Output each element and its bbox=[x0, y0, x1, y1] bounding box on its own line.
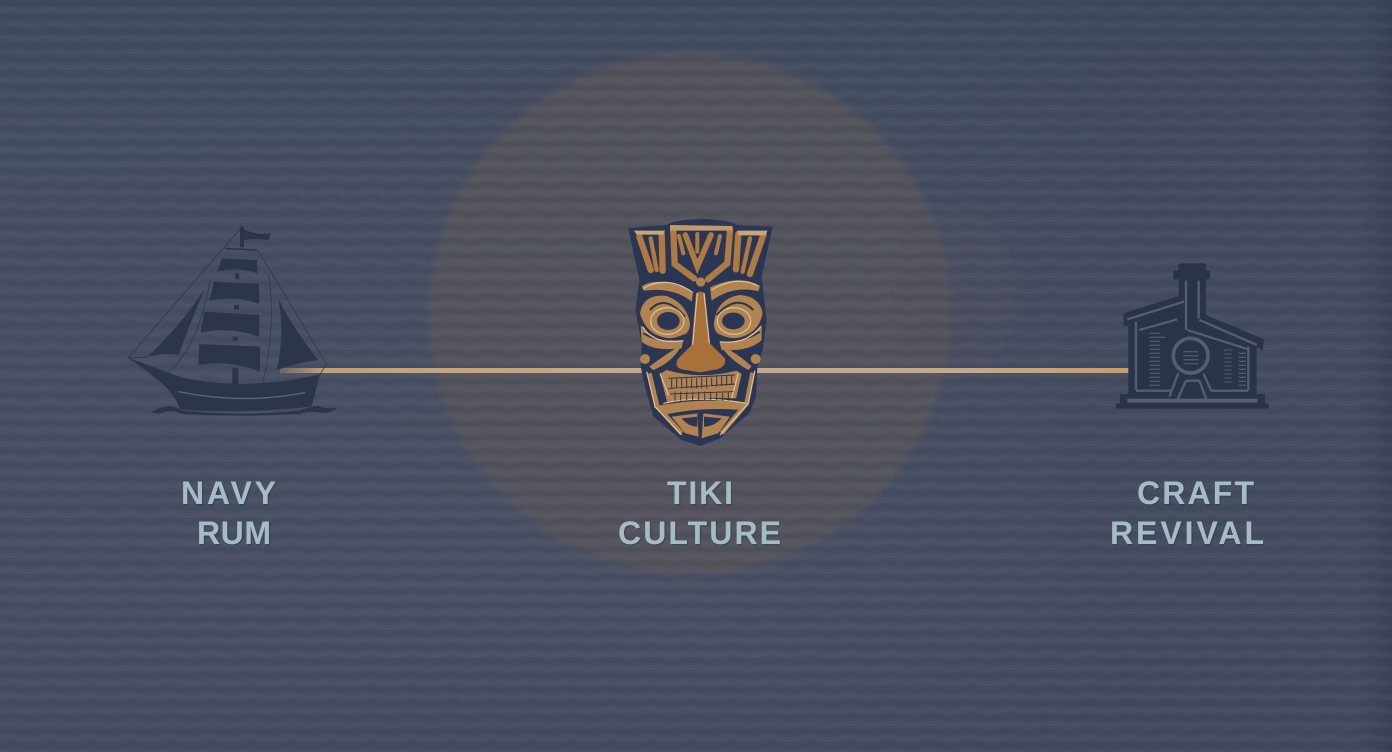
forehead panels bbox=[639, 231, 763, 279]
label: tiki culture bbox=[618, 475, 781, 551]
icon: tiki mask bbox=[628, 219, 773, 446]
label: navy rum: RUM bbox=[197, 515, 271, 551]
icon: distillery building bbox=[1116, 263, 1269, 409]
label: tiki culture: CULTURE bbox=[618, 515, 781, 551]
mask silhouette bbox=[628, 219, 773, 446]
label: craft revival: CRAFT bbox=[1137, 475, 1254, 511]
nose bbox=[676, 292, 725, 372]
jaw sides bbox=[649, 373, 753, 433]
label: navy rum bbox=[181, 475, 276, 551]
label: craft revival: REVIVAL bbox=[1110, 515, 1264, 551]
label: tiki culture: TIKI bbox=[667, 475, 733, 511]
glow circle behind tiki mask bbox=[429, 53, 1015, 575]
icon: sailing ship bbox=[128, 227, 337, 416]
label: craft revival bbox=[1110, 475, 1264, 551]
label: navy rum: NAVY bbox=[181, 475, 276, 511]
timeline connector bbox=[280, 368, 1130, 373]
